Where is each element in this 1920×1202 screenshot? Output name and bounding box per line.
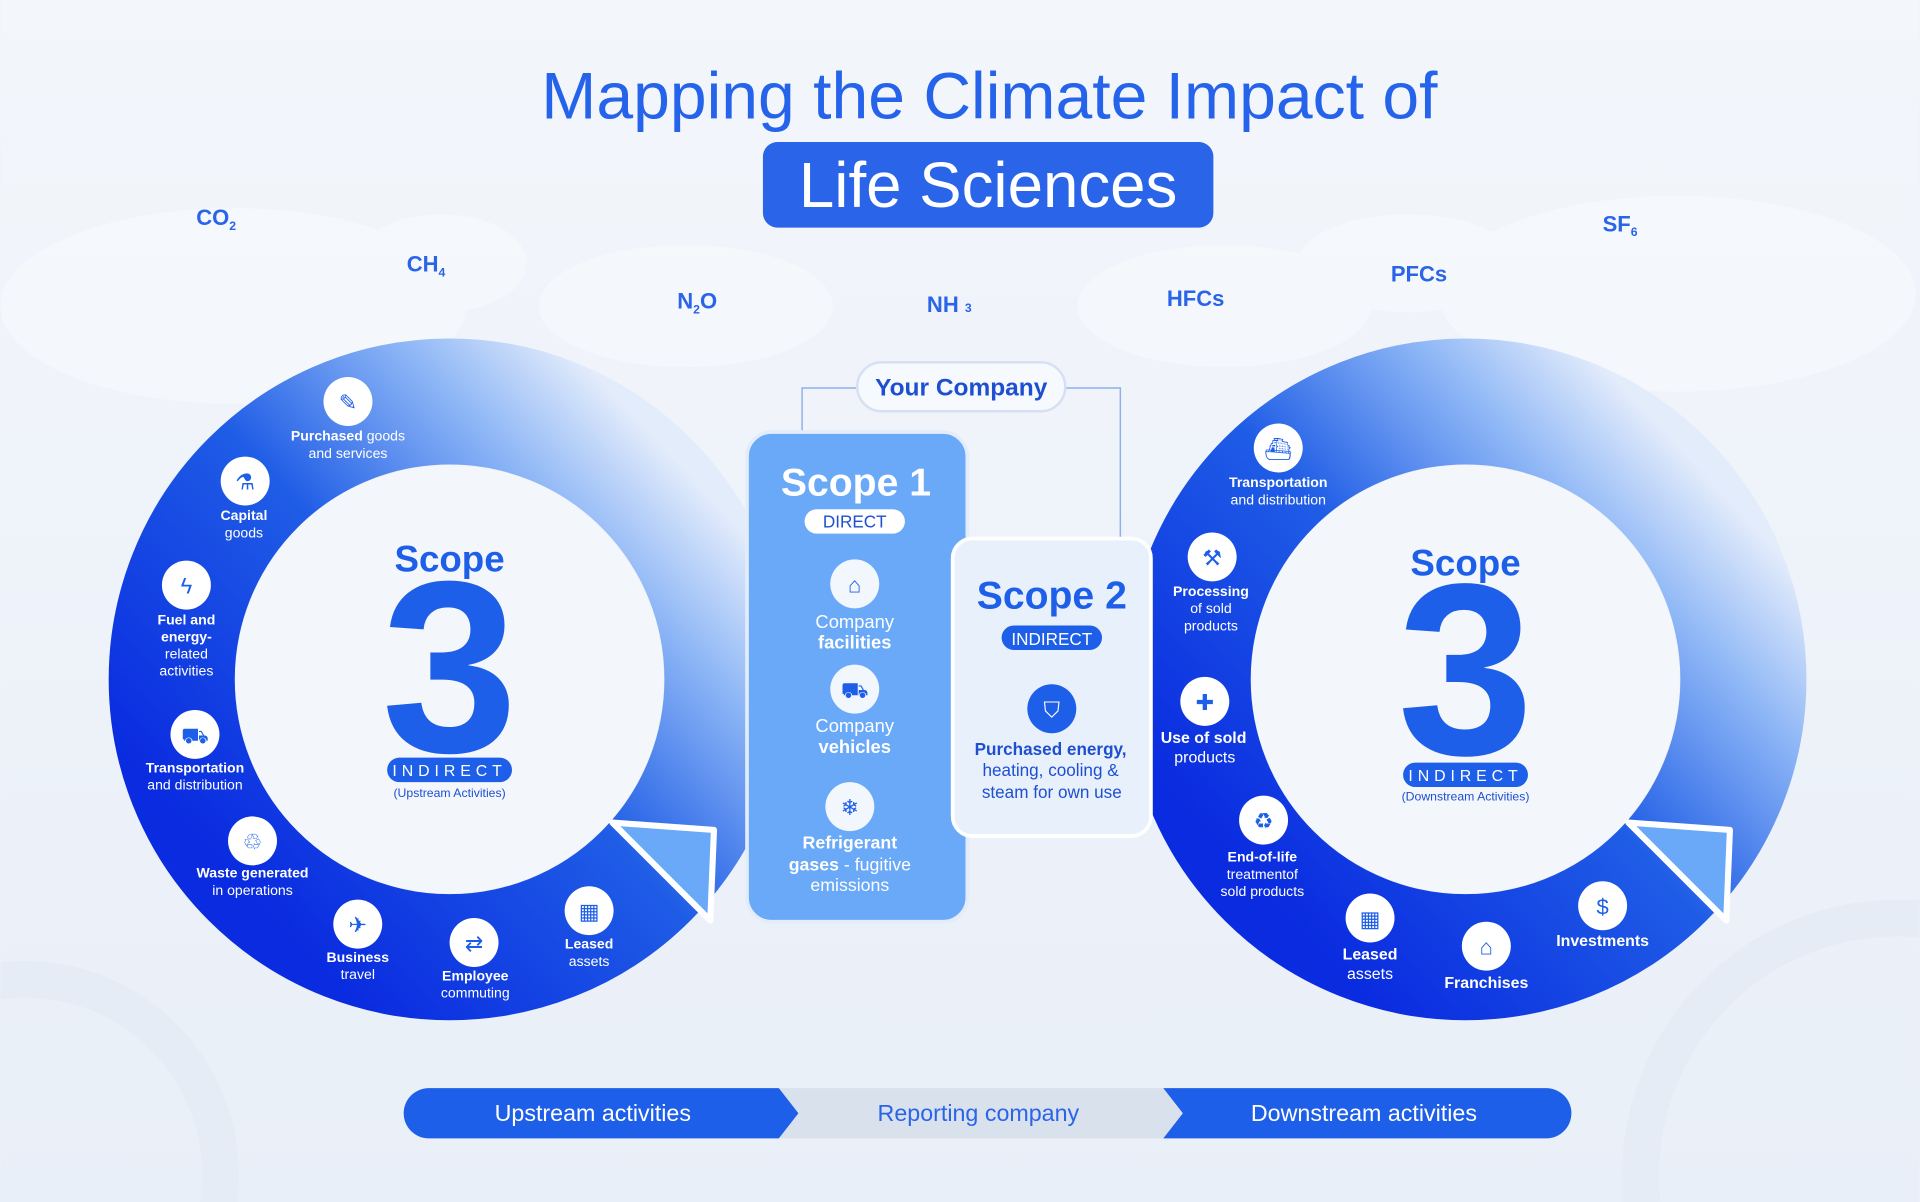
gas labels: 4 [439, 266, 446, 280]
right ring items: ▦ [1360, 907, 1380, 932]
left ring: scope 3 upstream [172, 401, 727, 957]
panel: scope 1: DIRECT [823, 512, 887, 532]
panel: scope 2: Purchased energy, [975, 739, 1127, 759]
left ring items: ♲ [243, 829, 262, 854]
bottom flow bar: Reporting company [878, 1100, 1080, 1126]
panel: scope 1: gases - fugitive [789, 854, 911, 874]
right ring items: ♻ [1254, 809, 1273, 834]
panel: scope 2: Scope 2 [977, 574, 1127, 617]
your company pill: Your Company [875, 374, 1048, 401]
right ring items: of sold [1190, 600, 1232, 616]
gas labels: SF [1603, 211, 1631, 236]
left ring items: Fuel and [157, 611, 215, 627]
right ring items: Investments [1556, 933, 1649, 950]
panel: scope 1: ⌂ [848, 572, 861, 597]
connector lines [802, 388, 1120, 539]
panel: scope 1: facilities [818, 632, 891, 653]
gas labels: N [677, 288, 693, 313]
panel: scope 1: Company [815, 715, 895, 736]
gas labels: O [700, 288, 717, 313]
panel: scope 1: Refrigerant [803, 832, 897, 852]
bottom flow bar: Upstream activities [495, 1100, 691, 1126]
right ring items: sold products [1221, 883, 1304, 899]
left ring items: and services [309, 445, 387, 461]
left ring items: Waste generated [197, 865, 309, 881]
left ring: scope 3 upstream: (Upstream Activities) [393, 786, 506, 800]
panel: scope 2: heating, cooling & [983, 760, 1119, 780]
left ring: scope 3 upstream: Scope [394, 539, 505, 580]
gas labels: 6 [1631, 225, 1638, 239]
right ring items: products [1184, 617, 1238, 633]
left ring items: Capital [220, 507, 267, 523]
gas labels: PFCs [1391, 262, 1447, 287]
right ring items: and distribution [1231, 491, 1326, 507]
right ring items: Transportation [1229, 474, 1327, 490]
right ring items: ✚ [1196, 690, 1214, 715]
left ring items: activities [159, 663, 213, 679]
bottom flow bar [404, 1088, 1571, 1138]
right ring: scope 3 downstream [1188, 401, 1743, 957]
left ring items: Purchased goods [291, 428, 405, 444]
gas labels: CH [407, 252, 439, 277]
gas labels: 2 [693, 302, 700, 316]
left ring items: ✎ [339, 390, 357, 415]
left ring items: ✈ [349, 913, 367, 938]
left ring items: and distribution [147, 777, 243, 793]
left ring items: in operations [212, 882, 293, 898]
right ring items: ⌂ [1480, 935, 1493, 960]
right ring items: End-of-life [1228, 849, 1297, 865]
gas labels: CO [196, 205, 229, 230]
panel: scope 1: Scope 1 [781, 462, 931, 505]
panel: scope 1: emissions [810, 875, 889, 895]
left ring items: assets [569, 953, 609, 969]
left ring items [146, 377, 614, 1001]
bottom flow bar: Downstream activities [1251, 1100, 1477, 1126]
right ring items: Leased [1343, 947, 1397, 964]
panel: scope 1: ❄ [841, 795, 859, 820]
left ring items: Transportation [146, 759, 244, 775]
left ring items: Business [327, 949, 389, 965]
title: Mapping the Climate Impact of [541, 60, 1438, 134]
left ring items: goods [225, 524, 263, 540]
gas labels [196, 205, 1638, 317]
right ring items: Use of sold [1161, 730, 1246, 747]
your company pill [857, 362, 1065, 411]
panel: scope 1: vehicles [818, 736, 891, 757]
right ring items [1161, 424, 1649, 992]
right ring items: ⛴ [1264, 437, 1292, 462]
panel: scope 1: Company [815, 611, 895, 632]
left ring items: energy- [161, 628, 212, 644]
right ring items: Franchises [1444, 975, 1528, 992]
left ring items: Employee [442, 967, 509, 983]
left ring items: travel [341, 966, 375, 982]
right ring: scope 3 downstream: INDIRECT [1408, 768, 1523, 785]
gas labels: HFCs [1167, 286, 1224, 311]
right ring items: Processing [1173, 583, 1249, 599]
left ring items: ⇄ [465, 931, 483, 956]
gas labels: NH 3 [927, 292, 972, 317]
panel: scope 2: INDIRECT [1011, 629, 1093, 649]
left ring items: related [165, 646, 208, 662]
left ring items: ⚗ [235, 470, 255, 495]
left ring items: ϟ [181, 574, 193, 599]
left ring items: Leased [565, 936, 613, 952]
left ring items: ⛟ [181, 723, 209, 748]
panel: scope 1 [747, 432, 967, 922]
left ring: scope 3 upstream: INDIRECT [392, 763, 507, 780]
left ring: scope 3 upstream: 3 [382, 530, 518, 804]
right ring: scope 3 downstream: Scope [1410, 542, 1521, 583]
gas labels: 2 [229, 219, 236, 233]
left ring items: ▦ [579, 899, 600, 924]
left ring items: commuting [441, 985, 510, 1001]
title pill: Life Sciences [799, 150, 1177, 221]
title pill [763, 142, 1213, 228]
right ring: scope 3 downstream: (Downstream Activities) [1402, 790, 1529, 804]
right ring items: assets [1347, 966, 1393, 983]
right ring: scope 3 downstream: 3 [1397, 532, 1534, 806]
panel: scope 2 [953, 539, 1151, 836]
panel: scope 2: ⛉ [1044, 697, 1061, 722]
right ring items: products [1174, 750, 1235, 767]
panel: scope 2: steam for own use [982, 782, 1122, 802]
right ring items: ⚒ [1202, 546, 1222, 571]
panel: scope 1: ⛟ [841, 678, 869, 703]
right ring items: $ [1596, 894, 1609, 919]
right ring items: treatmentof [1227, 866, 1298, 882]
